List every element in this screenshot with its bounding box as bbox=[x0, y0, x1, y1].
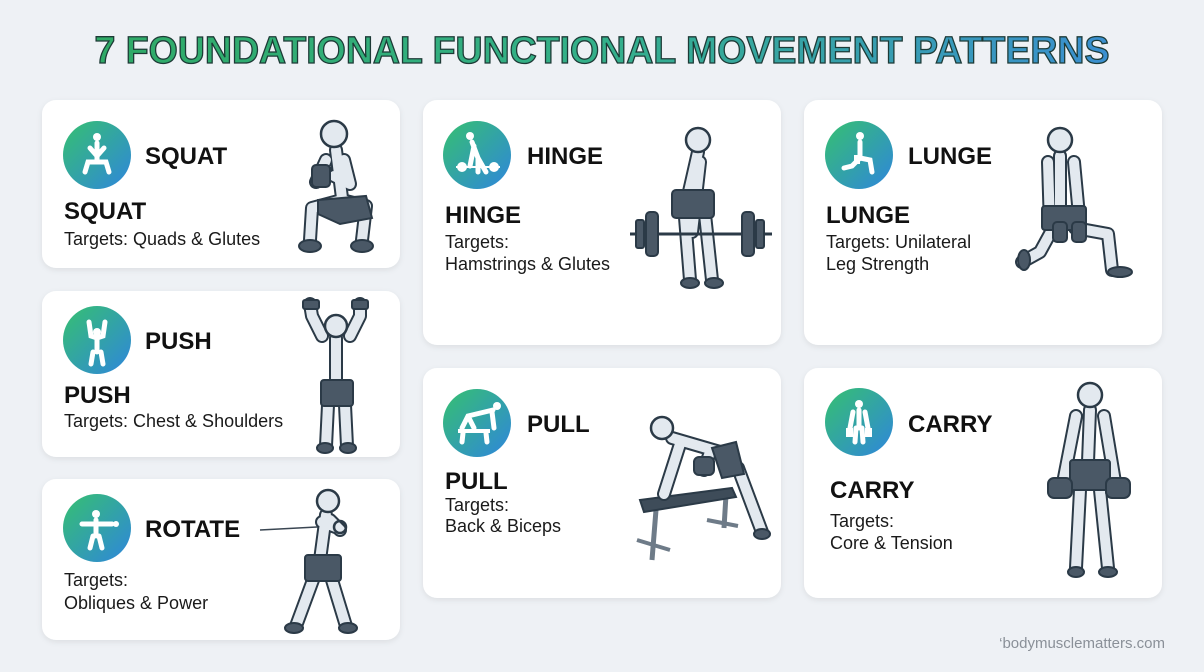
heading: lunge: LUNGE bbox=[908, 143, 992, 170]
text block: lunge bbox=[826, 202, 971, 274]
text block: rotate: Targets: bbox=[64, 570, 128, 590]
icon: carry bbox=[825, 388, 893, 456]
icon: rotate bbox=[63, 494, 131, 562]
text block: push: PUSH bbox=[64, 382, 131, 409]
title: 7 FOUNDATIONAL FUNCTIONAL MOVEMENT PATTERNS bbox=[94, 30, 1110, 72]
text block: carry: Core & Tension bbox=[830, 533, 953, 553]
icon: hinge bbox=[443, 121, 511, 189]
footer: source: ‘bodymusclematters.com bbox=[999, 635, 1165, 652]
text block: hinge: HINGE bbox=[445, 202, 521, 229]
figure: lunge bbox=[1018, 128, 1132, 277]
panel: push bbox=[42, 291, 400, 457]
text block: lunge: Leg Strength bbox=[826, 254, 929, 274]
text block: carry: CARRY bbox=[830, 477, 914, 504]
panel: rotate bbox=[42, 479, 400, 640]
icon: squat bbox=[63, 121, 131, 189]
figure: push bbox=[303, 300, 368, 453]
heading: squat: SQUAT bbox=[145, 143, 228, 170]
text block: pull: Back & Biceps bbox=[445, 516, 561, 536]
text block: push: Targets: Chest & Shoulders bbox=[64, 411, 283, 431]
text block: carry: Targets: bbox=[830, 511, 894, 531]
text block: pull: PULL bbox=[445, 468, 508, 495]
text block: squat: Targets: Quads & Glutes bbox=[64, 229, 260, 249]
text block: hinge: Hamstrings & Glutes bbox=[445, 254, 610, 274]
text block: squat bbox=[64, 198, 260, 249]
heading: rotate: ROTATE bbox=[145, 516, 240, 543]
text block: rotate bbox=[64, 570, 208, 613]
panel: hinge bbox=[423, 100, 781, 345]
text block: rotate: Obliques & Power bbox=[64, 593, 208, 613]
heading: pull: PULL bbox=[527, 411, 590, 438]
text block: carry bbox=[830, 477, 953, 553]
text block: hinge bbox=[445, 202, 610, 274]
panel: squat bbox=[42, 100, 400, 268]
figure: squat bbox=[299, 121, 373, 252]
text block: lunge: Targets: Unilateral bbox=[826, 232, 971, 252]
figure: rotate bbox=[260, 490, 357, 633]
text block: pull: Targets: bbox=[445, 495, 509, 515]
icon: push bbox=[63, 306, 131, 374]
figure: carry bbox=[1048, 383, 1130, 577]
text block: hinge: Targets: bbox=[445, 232, 509, 252]
text block: lunge: LUNGE bbox=[826, 202, 910, 229]
heading: carry: CARRY bbox=[908, 411, 992, 438]
panel: pull bbox=[423, 368, 781, 598]
text block: squat: SQUAT bbox=[64, 198, 147, 225]
text block: push bbox=[64, 382, 283, 431]
panel: lunge bbox=[804, 100, 1162, 345]
heading: hinge: HINGE bbox=[527, 143, 603, 170]
figure: hinge bbox=[630, 128, 772, 288]
text block: pull bbox=[445, 468, 561, 536]
icon: pull bbox=[443, 389, 511, 457]
icon: lunge bbox=[825, 121, 893, 189]
heading: push: PUSH bbox=[145, 328, 212, 355]
panel: carry bbox=[804, 368, 1162, 598]
figure: pull bbox=[637, 417, 770, 560]
